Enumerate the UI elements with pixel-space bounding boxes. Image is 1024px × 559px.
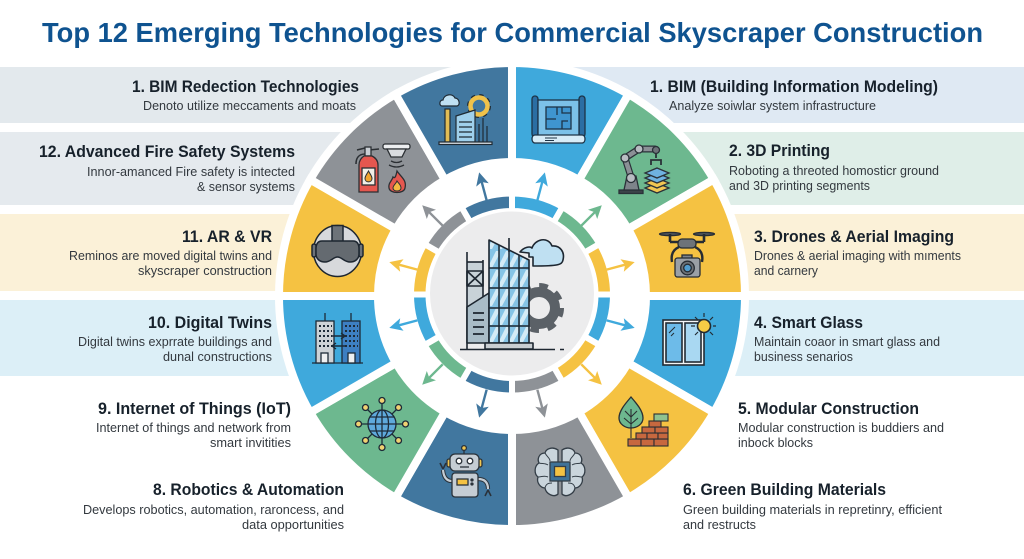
center hub disc: [430, 212, 594, 376]
segment: 3D printing green: [570, 94, 729, 254]
arc 5: [549, 331, 599, 389]
text: 2. 3D Printing: 2. 3D Printing: [729, 141, 830, 160]
arc 1: [512, 194, 562, 222]
text: 1. BIM Redection Technologies: [132, 77, 359, 113]
arrow 7: [473, 388, 493, 419]
text: 6. Green Building Materials: [683, 480, 943, 532]
icon: digital twin buildings: [312, 313, 363, 363]
text: 3. Drones & Aerial Imaging: 3. Drones & Aerial Imaging: [754, 227, 954, 246]
icon: central skyscraper with cloud and gear: [460, 238, 564, 350]
extinguisher: [356, 147, 379, 192]
icon: blueprint: [532, 96, 585, 143]
text: 10. Digital Twins: 10. Digital Twins: [148, 313, 272, 332]
text: 3. Drones & Aerial Imaging: [754, 227, 961, 278]
text: 12. Advanced Fire Safety Systems: & sensor systems: [197, 180, 295, 194]
arrow 12: [473, 171, 493, 202]
band: right row 1: [512, 67, 1024, 123]
arc 4: [584, 294, 613, 345]
text: 8. Robotics & Automation: [83, 480, 344, 532]
segment: smart glass blue: [628, 296, 745, 412]
arc 3: [575, 244, 625, 302]
segment: robotics dark blue: [396, 412, 512, 529]
arrow 5: [577, 360, 606, 389]
icon: robot: [440, 446, 491, 497]
arc 11: [425, 200, 475, 258]
arc 8: [418, 332, 476, 382]
arc 2: [548, 207, 606, 257]
smoke sensor: [383, 144, 410, 167]
glass tower: [485, 238, 533, 349]
title: Top 12 Emerging Technologies for Commercial Skyscraper Construction: [42, 17, 983, 48]
text: 8. Robotics & Automation: 8. Robotics & Automation: [153, 480, 344, 499]
text: 5. Modular Construction: Modular construction is buddiers and: [738, 421, 944, 435]
band: left row 3: [0, 214, 512, 291]
text: 4. Smart Glass: business senarios: [754, 350, 853, 364]
arrow 1: [531, 171, 551, 202]
segment: green materials gray: [469, 397, 628, 556]
arrow 2: [577, 201, 606, 230]
icon: fire safety: [356, 144, 410, 192]
arc 10: [411, 244, 440, 294]
text: 1. BIM (Building Information Modeling): 1. BIM (Building Information Modeling): [650, 77, 938, 96]
arrow 9: [388, 314, 419, 334]
scaffold: [467, 252, 483, 349]
text: 12. Advanced Fire Safety Systems: [39, 142, 295, 194]
text: 9. Internet of Things (IoT): 9. Internet of Things (IoT): [98, 399, 291, 418]
cloud: [520, 240, 563, 266]
text: 1. BIM (Building Information Modeling): Analyze soiwlar system infrastructure: [669, 99, 876, 113]
text: 4. Smart Glass: Maintain coaor in smart glass and: [754, 335, 940, 349]
arc 12: [462, 182, 520, 232]
text: 6. Green Building Materials: and restructs: [683, 518, 756, 532]
text: 10. Digital Twins: Digital twins exprrate buildings and: [78, 335, 272, 349]
icon: drone with camera: [660, 232, 714, 277]
band: right row 3: [512, 214, 1024, 291]
band: left row 4: [0, 300, 512, 376]
text: 6. Green Building Materials: 6. Green Building Materials: [683, 480, 886, 499]
text: 11. AR & VR: skyscraper construction: [138, 264, 272, 278]
text: 11. AR & VR: [69, 227, 272, 278]
segment: digital twins blue: [252, 253, 411, 412]
icon: brain with chip: [535, 448, 585, 496]
arc 9: [399, 287, 449, 345]
text: 11. AR & VR: 11. AR & VR: [182, 227, 272, 246]
text: 11. AR & VR: Reminos are moved digital twins and: [69, 249, 272, 263]
text: 12. Advanced Fire Safety Systems: 12. Advanced Fire Safety Systems: [39, 142, 295, 161]
icon: IoT globe network: [356, 398, 408, 450]
arc 7: [462, 367, 512, 396]
text: 5. Modular Construction: inbock blocks: [738, 436, 813, 450]
arrow 4: [605, 314, 636, 334]
text: 10. Digital Twins: [78, 313, 272, 364]
segment: IoT green: [295, 338, 454, 498]
text: 6. Green Building Materials: Green building materials in repretinry, efficient: [683, 503, 943, 517]
text: 2. 3D Printing: Roboting a threoted homosticr ground: [729, 164, 939, 178]
arc 6: [504, 357, 562, 407]
text: 8. Robotics & Automation: Develops robotics, automation, raroncess, and: [83, 503, 344, 517]
text: 5. Modular Construction: [738, 399, 944, 450]
icon: robotic arm with 3D layers: [619, 145, 669, 194]
band: left row 2: [0, 132, 512, 205]
segment: fire safety gray: [310, 79, 470, 238]
segment: drones yellow: [613, 180, 772, 339]
segment: modular yellow: [554, 354, 714, 513]
text: 3. Drones & Aerial Imaging: and carnery: [754, 264, 819, 278]
inner ring of twelve arcs: [399, 182, 625, 407]
text: 1. BIM Redection Technologies: 1. BIM Redection Technologies: [132, 77, 359, 96]
segment: BIM reduction dark blue: [396, 36, 555, 195]
arrow 8: [418, 360, 447, 389]
arrows radiating from ring to segments: [388, 171, 636, 419]
icon: city with cloud and gear: [439, 95, 492, 144]
arrow 6: [531, 388, 551, 419]
text: 4. Smart Glass: 4. Smart Glass: [754, 313, 863, 332]
segment: AR VR yellow: [279, 180, 396, 296]
text: 3. Drones & Aerial Imaging: Drones & aerial imaging with mıments: [754, 249, 961, 263]
gear: [516, 286, 562, 330]
icon: smart glass window with sun: [663, 313, 716, 365]
text: 4. Smart Glass: [754, 313, 940, 364]
text: 10. Digital Twins: dunal constructions: [163, 350, 272, 364]
low side building: [467, 293, 489, 343]
arrow 10: [388, 256, 419, 276]
text: 1. BIM (Building Information Modeling): [650, 77, 938, 113]
arrow 11: [418, 201, 447, 230]
text: 5. Modular Construction: 5. Modular Construction: [738, 399, 919, 418]
segment: BIM blue: [512, 63, 628, 180]
band: left row 1: [0, 67, 512, 123]
wheel of twelve outer segments: [252, 36, 772, 556]
ground line: [460, 348, 564, 350]
text: 9. Internet of Things (IoT): [96, 399, 291, 450]
white halo behind wheel: [278, 62, 746, 530]
text: 9. Internet of Things (IoT): Internet of things and network from: [96, 421, 291, 435]
text: 9. Internet of Things (IoT): smart invitities: [210, 436, 291, 450]
text: 2. 3D Printing: and 3D printing segments: [729, 179, 870, 193]
text: 2. 3D Printing: [729, 141, 939, 193]
flame: [389, 171, 405, 192]
text: 1. BIM Redection Technologies: Denoto utilize meccaments and moats: [143, 99, 356, 113]
text: 8. Robotics & Automation: data opportunities: [242, 518, 344, 532]
icon: VR headset: [312, 226, 363, 276]
band: right row 2: [512, 132, 1024, 205]
arrow 3: [605, 256, 636, 276]
text: 12. Advanced Fire Safety Systems: Innor-amanced Fire safety is intected: [87, 165, 295, 179]
band: right row 4: [512, 300, 1024, 376]
icon: leaf and bricks: [619, 397, 668, 446]
